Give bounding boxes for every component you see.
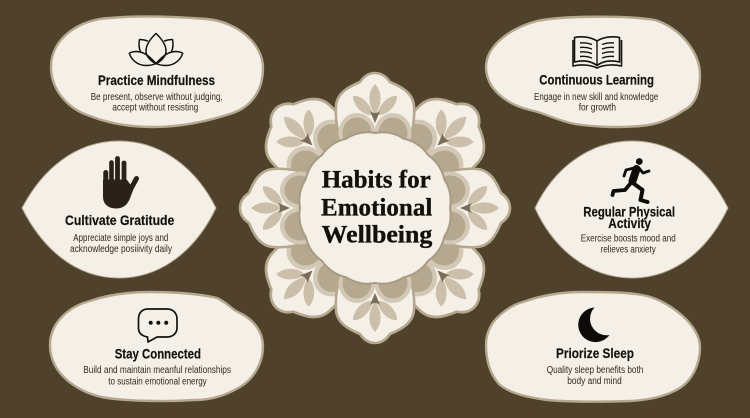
heading: continuous learning: Continuous Learning bbox=[539, 72, 654, 88]
title: Emotional bbox=[321, 195, 432, 222]
heading: practice mindfulness: Practice Mindfulness bbox=[98, 72, 215, 88]
text: prioritize sleep description bbox=[547, 365, 643, 387]
text: continuous learning description bbox=[534, 92, 659, 114]
title: Wellbeing bbox=[322, 222, 433, 249]
text: practice mindfulness description: accept without resisting bbox=[112, 102, 198, 114]
panel: prioritize sleep bbox=[486, 292, 700, 402]
text: stay connected description: Build and maintain meanful relationships bbox=[83, 365, 231, 376]
panel: cultivate gratitude bbox=[22, 141, 216, 278]
text: prioritize sleep description: Quality sleep benefits both bbox=[547, 365, 643, 376]
text: cultivate gratitude description bbox=[70, 233, 172, 255]
text: cultivate gratitude description: acknowledge posiiivity daily bbox=[70, 244, 172, 255]
heading: prioritize sleep: Priorize Sleep bbox=[556, 345, 634, 361]
icon: lotus bbox=[129, 34, 183, 66]
text: continuous learning description: for growth bbox=[579, 102, 616, 114]
panel: practice mindfulness bbox=[51, 16, 263, 127]
text: stay connected description bbox=[83, 365, 231, 388]
central flower emblem bbox=[240, 73, 510, 343]
heading: regular physical activity: Activity bbox=[608, 215, 651, 231]
icon: runner bbox=[612, 158, 649, 202]
icon: crescent moon bbox=[578, 308, 610, 342]
text: prioritize sleep description: body and mind bbox=[567, 376, 622, 387]
text: continuous learning description: Engage in new skill and knowledge bbox=[534, 92, 659, 103]
title: Habits for bbox=[322, 166, 431, 193]
panel: continuous learning bbox=[486, 17, 700, 127]
title bbox=[321, 166, 433, 249]
panel: stay connected bbox=[50, 292, 263, 401]
text: stay connected description: to sustain emotional energy bbox=[108, 376, 207, 388]
text: regular physical activity description: Exercise boosts mood and bbox=[581, 234, 676, 245]
text: regular physical activity description bbox=[581, 234, 676, 256]
text: practice mindfulness description: Be present, observe without judging, bbox=[91, 92, 223, 103]
icon: chat bubble bbox=[138, 309, 177, 342]
text: regular physical activity description: relieves anxiety bbox=[601, 244, 656, 256]
heading: regular physical activity: Regular Physical bbox=[583, 204, 675, 220]
icon: raised hand bbox=[104, 158, 136, 208]
heading: cultivate gratitude: Cultivate Gratitude bbox=[65, 212, 174, 228]
text: practice mindfulness description bbox=[91, 92, 223, 114]
panel: regular physical activity bbox=[535, 141, 728, 278]
icon: open book bbox=[573, 37, 622, 68]
heading: regular physical activity bbox=[583, 204, 675, 231]
text: cultivate gratitude description: Appreciate simple joys and bbox=[73, 233, 168, 244]
heading: stay connected: Stay Connected bbox=[115, 345, 201, 361]
